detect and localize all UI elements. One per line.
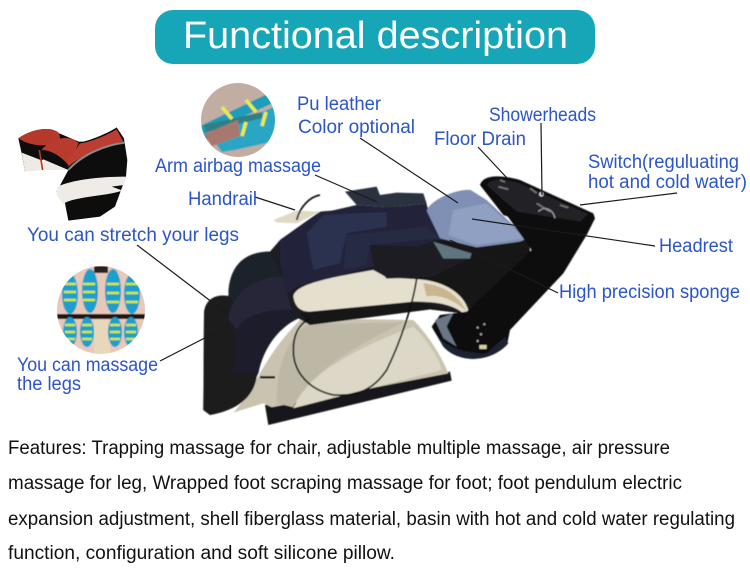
callout lines — [137, 123, 677, 361]
title — [155, 10, 595, 64]
handrail — [273, 211, 321, 223]
photo: massage chair with basin — [203, 176, 595, 425]
label: hot and cold water: hot and cold water) — [588, 172, 747, 193]
features text — [8, 438, 735, 564]
features text: function, configuration and soft silicone pillow. — [8, 543, 395, 564]
basin rim — [480, 176, 595, 235]
inset: arm airbag — [201, 83, 275, 157]
label: Headrest: Headrest — [659, 236, 734, 257]
top cushion — [427, 190, 527, 247]
armrest pad — [370, 242, 472, 279]
label: High precision sponge: High precision sponge — [559, 282, 740, 303]
features text: massage for leg, Wrapped foot scraping massage for foot; foot pendulum electric — [8, 473, 682, 494]
features text: expansion adjustment, shell fiberglass material, basin with hot and cold water regulating — [8, 509, 735, 530]
label: Switch: Switch(reguluating — [588, 152, 739, 173]
chair dark backing silhouette — [203, 205, 530, 415]
cords — [297, 195, 320, 220]
dark under armrest — [300, 302, 463, 325]
label: Arm airbag massage: Arm airbag massage — [155, 156, 321, 177]
label: Handrail: Handrail — [188, 189, 257, 210]
chair base — [265, 372, 452, 425]
inset: stretched legs — [18, 127, 127, 221]
label: Color optional: Color optional — [298, 117, 415, 138]
label: Pu leather: Pu leather — [297, 94, 382, 115]
beige armrest — [293, 270, 468, 315]
label: You can massage: You can massage — [17, 355, 158, 376]
leg rest — [203, 296, 257, 415]
title: Functional description — [183, 15, 568, 57]
inset: leg massage — [55, 264, 147, 356]
black body — [418, 240, 530, 310]
top pads — [345, 187, 427, 207]
label: Floor Drain: Floor Drain — [434, 129, 526, 150]
features text: Features: Trapping massage for chair, adjustable multiple massage, air pressure — [8, 438, 670, 459]
label: Showerheads: Showerheads — [489, 105, 596, 126]
basin body — [432, 215, 587, 359]
seat cover — [280, 207, 443, 294]
label: You can stretch your legs: You can stretch your legs — [27, 225, 239, 246]
label: the legs: the legs — [17, 374, 81, 395]
